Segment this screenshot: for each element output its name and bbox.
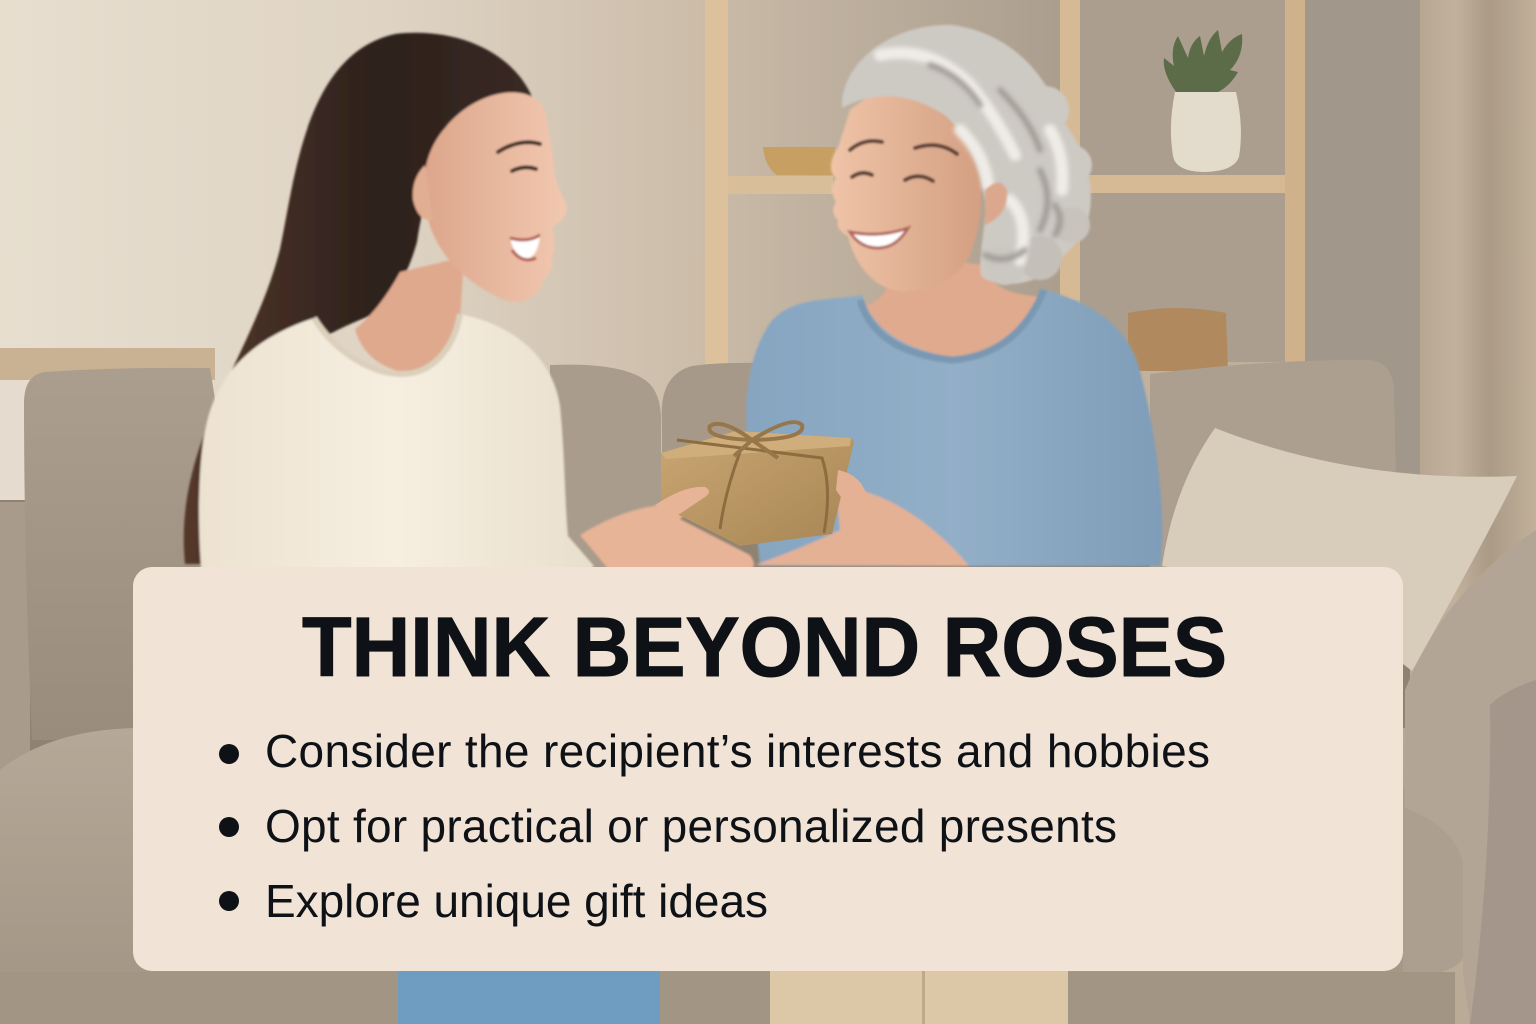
icon: kraft gift box bbox=[655, 422, 868, 546]
smile bbox=[510, 235, 540, 259]
icon: woven basket bbox=[1128, 308, 1228, 371]
sofa arm left bbox=[0, 502, 30, 802]
bullet 3: Explore unique gift ideas bbox=[265, 875, 768, 927]
eyes and brows bbox=[850, 141, 957, 181]
sofa arm right bbox=[1405, 530, 1536, 1024]
icon: potted plant bbox=[1164, 30, 1242, 172]
panel: text card bbox=[133, 567, 1403, 971]
eye and brow bbox=[498, 142, 540, 171]
fingers over gift bbox=[655, 487, 709, 517]
neck bbox=[355, 257, 464, 374]
ear bbox=[985, 182, 1007, 225]
woman left bbox=[184, 33, 754, 601]
icon: small plant bbox=[782, 304, 822, 331]
throw pillow bbox=[1162, 428, 1517, 671]
icon: shelf bowl bbox=[763, 147, 835, 175]
face bbox=[831, 87, 981, 291]
sofa base bbox=[0, 972, 1455, 1024]
seat cushions bbox=[0, 728, 1405, 978]
bullet 1: Consider the recipient’s interests and hobbies bbox=[265, 725, 1210, 777]
bullet 2: Opt for practical or personalized presents bbox=[265, 800, 1117, 852]
left back cushion bbox=[24, 368, 270, 740]
face bbox=[424, 92, 567, 302]
smile bbox=[850, 228, 908, 248]
sofa bbox=[0, 360, 1536, 1024]
centre-left cushion bbox=[546, 365, 661, 580]
right back cushion bbox=[1150, 360, 1396, 590]
long dark hair bbox=[184, 33, 537, 564]
shelving unit bbox=[705, 0, 1305, 371]
centre-right cushion bbox=[662, 363, 762, 463]
blue sweater bbox=[746, 289, 1162, 566]
hands bbox=[755, 468, 969, 566]
neck bbox=[863, 255, 1045, 357]
hand holding gift bbox=[580, 485, 754, 571]
bullet list bbox=[219, 725, 1210, 927]
grey curly hair bbox=[842, 25, 1092, 285]
curtain bbox=[1420, 0, 1536, 700]
heading: THINK BEYOND ROSES bbox=[302, 600, 1227, 694]
woman right bbox=[746, 25, 1162, 566]
trousers bbox=[398, 965, 1068, 1024]
cream sweater bbox=[199, 314, 594, 601]
ear bbox=[413, 165, 433, 220]
